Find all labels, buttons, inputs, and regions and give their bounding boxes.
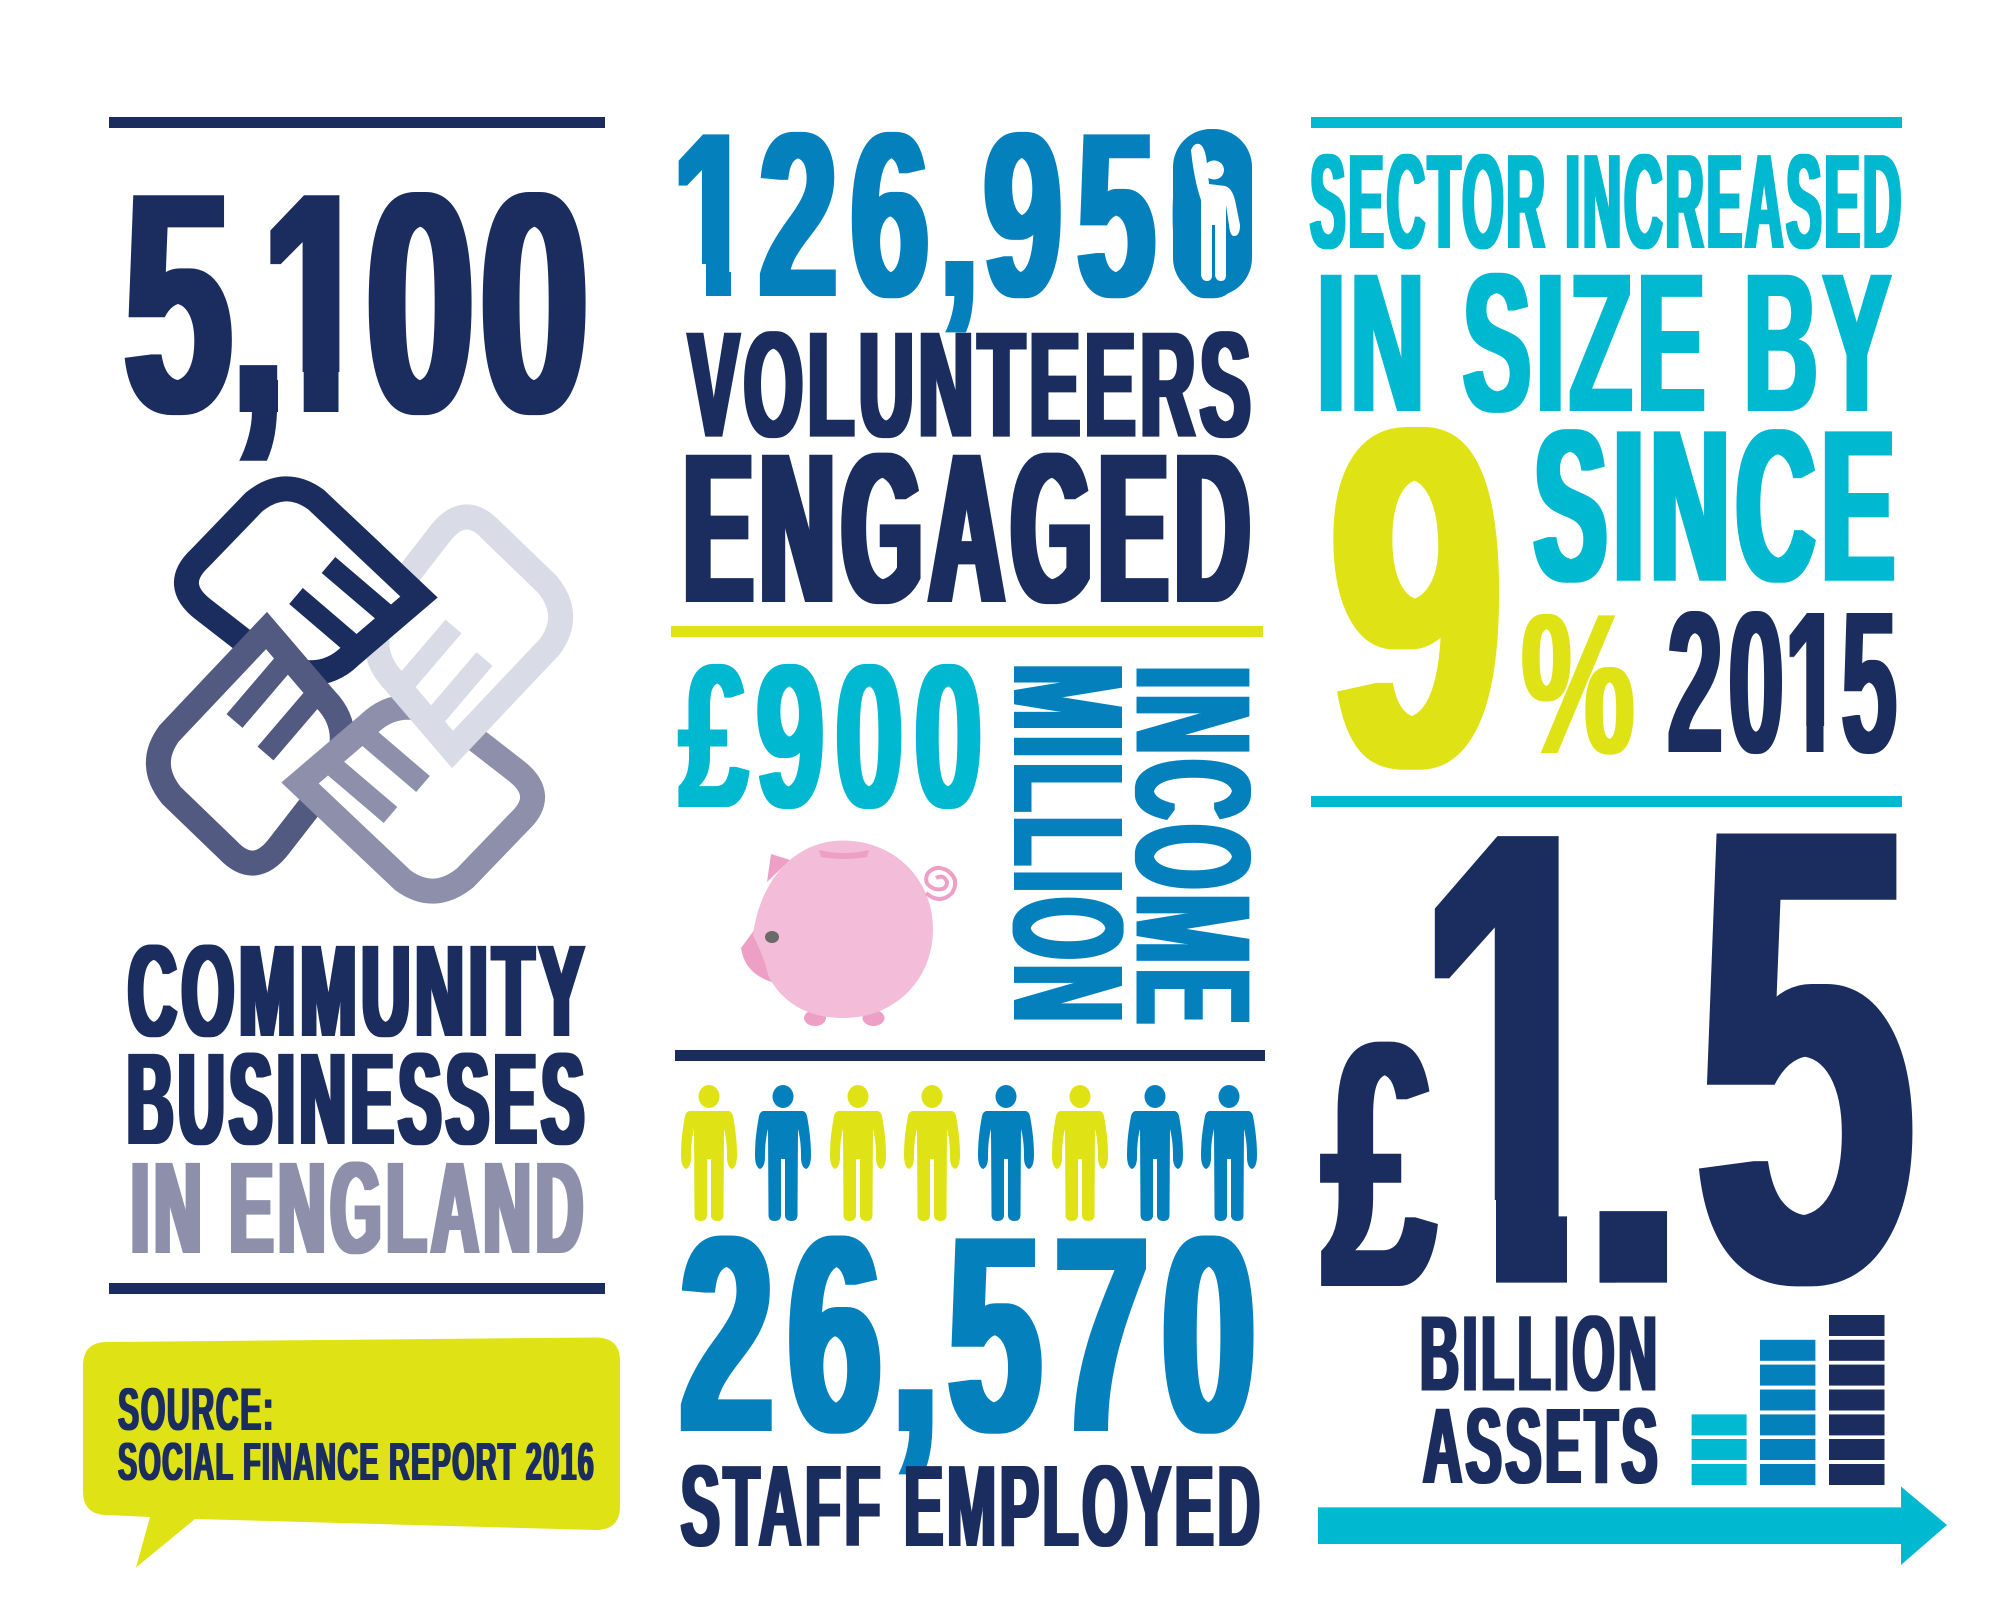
- label: volunteers engaged: VOLUNTEERS: [688, 300, 1256, 469]
- stat: £900: £900: [680, 621, 982, 851]
- text: ENGAGED: [684, 409, 1257, 648]
- stat: £1.5: £: [1323, 970, 1435, 1361]
- label: income (vertical): INCOME: [1102, 666, 1284, 1029]
- label: 2015: 2015: [1667, 569, 1897, 795]
- callout: source: SOCIAL FINANCE REPORT 2016: [118, 1432, 595, 1492]
- stat: 5,100: 5,100: [124, 127, 589, 479]
- label: billion assets: ASSETS: [1423, 1385, 1661, 1506]
- label: billion assets: BILLION: [1420, 1292, 1660, 1414]
- label: volunteers engaged: [684, 300, 1257, 648]
- icon: volunteer raising hand: [1173, 129, 1252, 296]
- label: billion assets: [1420, 1292, 1661, 1506]
- panel: community businesses: BUSINESSES: [127, 1025, 589, 1172]
- stat: £1.5: [1323, 692, 1917, 1421]
- stat: percent sign: %: [1521, 573, 1635, 796]
- arrow: growth: [1318, 1486, 1947, 1565]
- stat: 9: 9: [1331, 327, 1503, 868]
- panel: community businesses: [83, 117, 620, 1568]
- panel: income: [680, 621, 1284, 1029]
- heading: community businesses in England: IN ENGLAND: [131, 1134, 588, 1281]
- panel: sector growth: [1310, 117, 1904, 868]
- icon: piggy bank: [741, 840, 955, 1026]
- panel: staff: [680, 1085, 1264, 1571]
- chart: stacked bars: [1692, 1315, 1884, 1485]
- icon row: people: [681, 1085, 1257, 1221]
- icon: interlocking hands: [158, 489, 561, 891]
- label: million (vertical): MILLION: [980, 664, 1155, 1027]
- stat: £1.5: .: [1567, 848, 1700, 1385]
- heading: community businesses in England: COMMUNITY: [128, 917, 589, 1064]
- label: staff employed: STAFF EMPLOYED: [681, 1441, 1264, 1571]
- stat: £1.5: 1: [1417, 695, 1619, 1421]
- callout: source: SOURCE:: [118, 1376, 275, 1443]
- panel: volunteers: [672, 85, 1257, 648]
- stat: 126,950: 126,950: [673, 85, 1249, 347]
- panel: assets: [1318, 692, 1947, 1565]
- stat: 26,570: 26,570: [680, 1178, 1255, 1490]
- callout: source: [83, 1338, 620, 1568]
- heading: community businesses in England: [127, 917, 589, 1281]
